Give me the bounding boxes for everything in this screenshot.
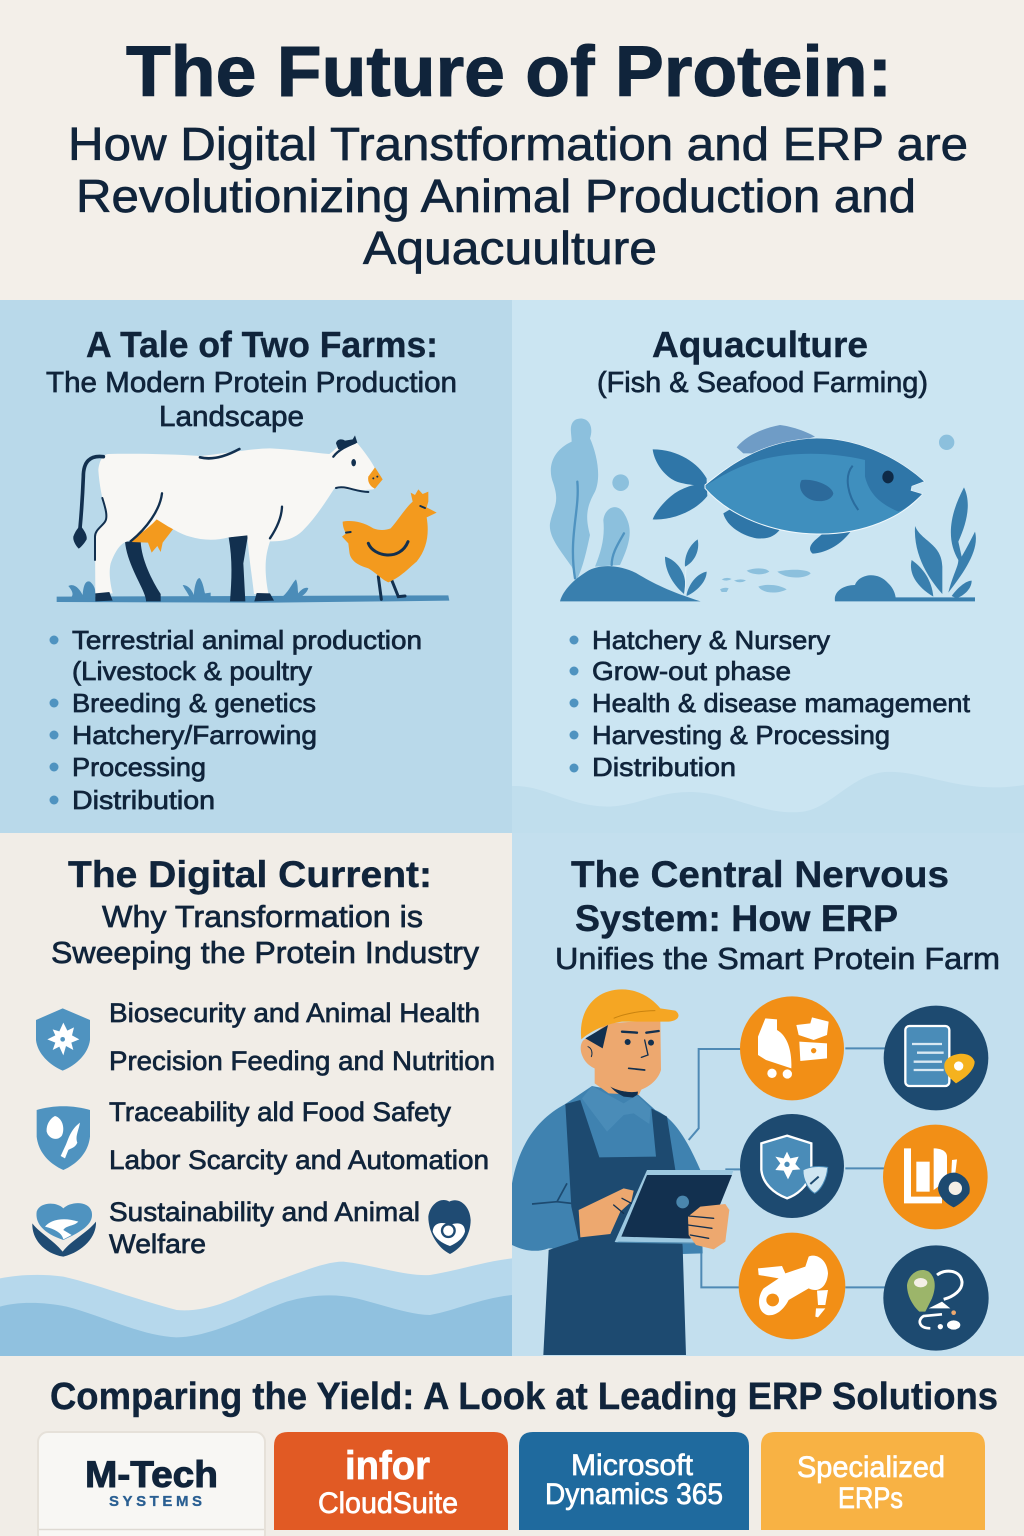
panel: the digital current: [0, 833, 512, 1356]
far legs: [125, 522, 248, 601]
circle icon: livestock and devices: [740, 996, 844, 1100]
heading: comparing the yield: Comparing the Yield: A Look at Leading ERP Solutions: [50, 1376, 998, 1418]
card: Microsoft Dynamics 365: [519, 1432, 749, 1530]
list: transformation drivers: Biosecurity and Animal Health: [109, 998, 480, 1028]
bullet list: terrestrial stages: Breeding & genetics: [72, 688, 316, 718]
subheading: why transformation is sweeping: [51, 899, 480, 970]
card: infor CloudSuite: CloudSuite: [318, 1487, 458, 1520]
worker with tablet: [512, 989, 734, 1355]
connector lines: [689, 1048, 885, 1287]
decorative waves: [0, 1258, 512, 1356]
cow markings: [80, 443, 368, 560]
subheading: unifies the smart protein farm: Unifies the Smart Protein Farm: [555, 941, 1000, 976]
subtitle: Aquacuulture: [363, 222, 657, 274]
list: transformation drivers: Sustainability and Animal: [109, 1197, 420, 1227]
foreground plants: [560, 487, 976, 601]
subheading: why transformation is sweeping: Why Transformation is: [102, 899, 423, 934]
circle icon: biosecurity shield: [740, 1114, 844, 1218]
heading: the central nervous system: The Central Nervous: [571, 854, 949, 895]
list: transformation drivers: Precision Feeding and Nutrition: [109, 1046, 495, 1076]
illustration: cow and chicken: [57, 435, 449, 603]
card: infor CloudSuite: [274, 1432, 508, 1530]
dorsal fin: [737, 425, 815, 453]
bullet list: aquaculture stages: Hatchery & Nursery: [592, 625, 830, 655]
tail and fins: [653, 449, 851, 554]
bullet list: aquaculture stages: Harvesting & Processing: [592, 720, 890, 750]
bullet list: terrestrial stages: Distribution: [72, 785, 215, 815]
icon: sustainability heart hands: [32, 1203, 96, 1257]
subheading: modern protein production landscape: [46, 367, 457, 433]
card: Specialized ERPs: [761, 1432, 985, 1530]
subheading: modern protein production landscape: The Modern Protein Production: [46, 367, 457, 399]
bullet list: aquaculture stages: Distribution: [592, 752, 736, 782]
heading: the digital current: The Digital Current:: [68, 854, 432, 895]
card: Specialized ERPs: Specialized: [797, 1451, 945, 1484]
bullet list: aquaculture stages: Grow-out phase: [592, 656, 791, 686]
header panel: [0, 0, 1024, 300]
panel: comparing the yield: [0, 1356, 1024, 1536]
circle icon: document and location pin: [884, 1006, 988, 1110]
icon: traceability shield: [37, 1106, 90, 1170]
ground and grass: [57, 578, 449, 603]
list: transformation drivers: Labor Scarcity and Automation: [109, 1145, 489, 1175]
subheading: modern protein production landscape: Landscape: [159, 401, 304, 433]
circle icon: machinery: [739, 1233, 845, 1339]
heading: a tale of two farms: A Tale of Two Farms:: [86, 324, 438, 365]
panel: terrestrial farms: [0, 300, 512, 833]
card: M-Tech Systems: [38, 1432, 265, 1536]
circle icon: analytics chart: [883, 1125, 988, 1229]
bullet list: aquaculture stages: Health & disease mamagement: [592, 688, 971, 718]
illustration: fish and seaweed: [550, 419, 976, 601]
subtitle: [68, 118, 968, 274]
heading: the central nervous system: System: How ERP: [575, 898, 898, 939]
bullet list: terrestrial stages: (Livestock & poultry: [72, 656, 312, 686]
chicken: [342, 489, 437, 599]
title: The Future of Protein:: [126, 33, 892, 112]
bullet list: terrestrial stages: Processing: [72, 752, 206, 782]
bullet list: terrestrial stages: [50, 625, 422, 815]
background seaweed: [550, 419, 954, 593]
fish back shading: [705, 438, 924, 512]
card: infor CloudSuite: infor: [345, 1444, 430, 1488]
bullet list: aquaculture stages: [570, 625, 971, 782]
heading: the central nervous system: [571, 854, 949, 939]
bullet list: terrestrial stages: Terrestrial animal production: [72, 625, 422, 655]
list: transformation drivers: Welfare: [109, 1229, 206, 1259]
card: Specialized ERPs: ERPs: [838, 1482, 903, 1515]
panel: the central nervous system: [512, 833, 1024, 1356]
card: Microsoft Dynamics 365: Microsoft: [571, 1449, 694, 1482]
udder: [131, 519, 174, 553]
bullet list: terrestrial stages: Hatchery/Farrowing: [72, 720, 317, 750]
decorative seabed wave: [512, 772, 1024, 833]
subheading: fish and seafood farming: (Fish & Seafood Farming): [597, 367, 928, 399]
card: M-Tech Systems: SYSTEMS: [109, 1493, 202, 1510]
circle icon: supply chain map: [883, 1245, 989, 1351]
heading: aquaculture: Aquaculture: [652, 324, 868, 365]
list: transformation drivers: [109, 998, 495, 1259]
cow head details: [73, 435, 383, 601]
card: M-Tech Systems: M-Tech: [85, 1454, 218, 1495]
subtitle: Revolutionizing Animal Production and: [76, 170, 916, 222]
icon: biosecurity shield: [36, 1008, 90, 1071]
list: transformation drivers: Traceability ald Food Safety: [109, 1097, 452, 1127]
panel: aquaculture: [512, 300, 1024, 833]
icon: animal welfare leaf badge: [428, 1200, 471, 1254]
card: Microsoft Dynamics 365: Dynamics 365: [545, 1478, 723, 1511]
subtitle: How Digital Transtformation and ERP are: [68, 118, 968, 170]
fish body: [705, 438, 924, 534]
subheading: why transformation is sweeping: Sweeping the Protein Industry: [51, 935, 480, 970]
cow body: [95, 443, 382, 594]
eye, gill and side fin: [800, 466, 894, 510]
